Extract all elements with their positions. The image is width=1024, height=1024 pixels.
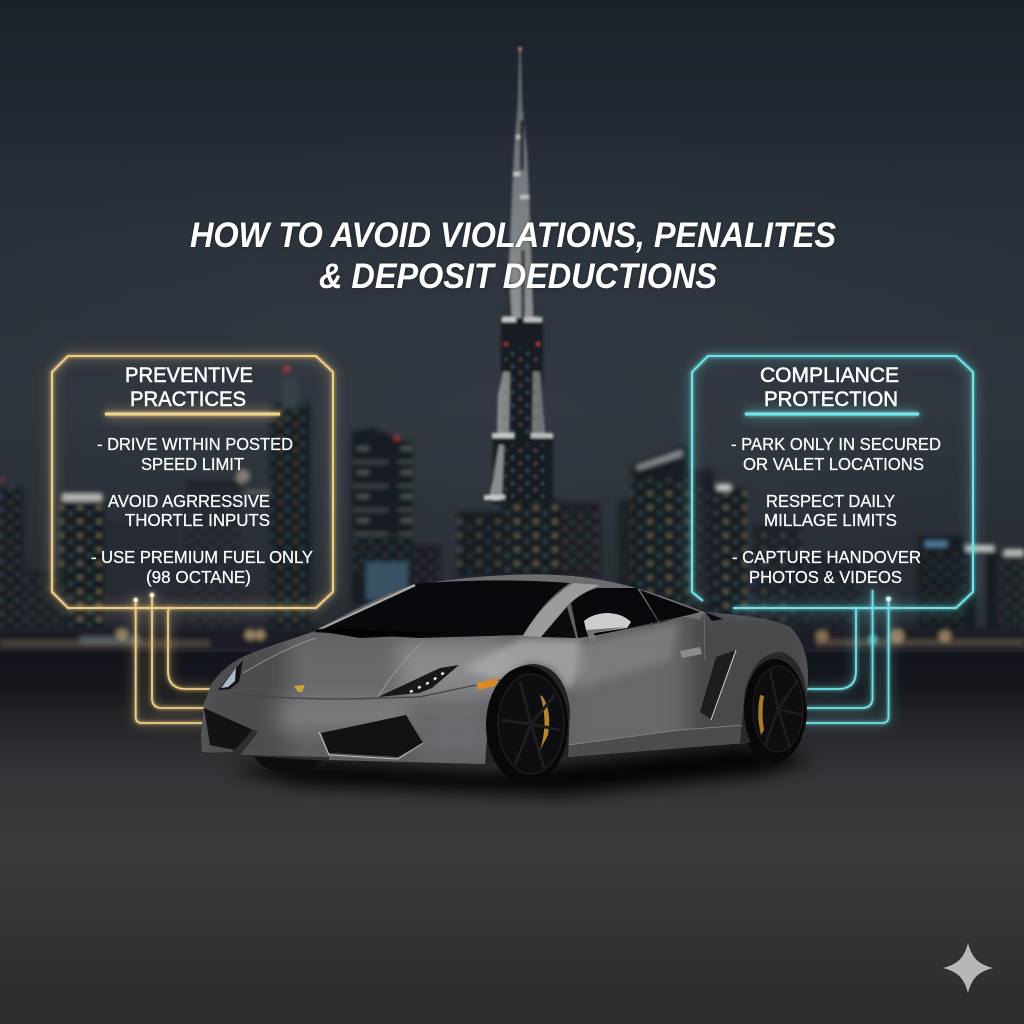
sports car (200, 574, 810, 784)
side window (571, 588, 659, 638)
panel list (731, 434, 941, 587)
panel list: SPEED LIMIT (141, 454, 244, 474)
door highlight (575, 622, 680, 690)
panel heading: PREVENTIVE (125, 364, 253, 387)
badge (294, 685, 305, 692)
amber marker (476, 678, 499, 690)
right front grille (321, 715, 423, 757)
mirror (584, 613, 631, 647)
windshield strip (312, 584, 416, 632)
panel list: AVOID AGRRESSIVE (108, 491, 270, 511)
left front grille (204, 708, 253, 750)
A pillar (523, 583, 600, 637)
car body silhouette (201, 574, 808, 764)
yellow connectors (134, 593, 214, 723)
panel list: PHOTOS & VIDEOS (749, 567, 902, 587)
side intake (700, 650, 736, 720)
panel list: THORTLE INPUTS (125, 510, 270, 530)
panel list: OR VALET LOCATIONS (743, 454, 924, 474)
roof (414, 574, 704, 620)
rear window (640, 590, 700, 623)
panel list: MILLAGE LIMITS (764, 510, 897, 530)
panel list: - DRIVE WITHIN POSTED (97, 434, 293, 454)
rear tyre under body (739, 657, 807, 763)
right headlight (378, 665, 459, 697)
shoulder line (578, 612, 705, 660)
panel: compliance protection (692, 356, 973, 608)
front wheel (486, 666, 568, 784)
panel heading (760, 364, 899, 411)
panel: preventive practices (52, 356, 333, 608)
rear wheel (744, 659, 806, 761)
fender highlight (462, 638, 590, 690)
front left tyre (253, 755, 327, 772)
panel heading: PROTECTION (764, 388, 898, 411)
grille trim (319, 732, 423, 759)
rear vent (705, 612, 723, 621)
door handle (680, 647, 702, 658)
quarter glass (541, 607, 576, 638)
water band (0, 652, 1024, 714)
panel list: - USE PREMIUM FUEL ONLY (91, 547, 313, 567)
front wheel arch (485, 664, 570, 764)
car shadow (225, 745, 815, 795)
heading underline (745, 412, 919, 416)
waterfront lights (0, 628, 1024, 652)
panel list: - CAPTURE HANDOVER (732, 547, 921, 567)
windshield (312, 580, 570, 638)
icon: sparkle (943, 943, 993, 993)
left headlight (218, 660, 243, 690)
main title (190, 216, 836, 296)
panel heading: COMPLIANCE (760, 364, 899, 387)
city skyline (0, 366, 1024, 648)
panel list: RESPECT DAILY (766, 491, 895, 511)
teal connectors (802, 590, 891, 723)
main title: HOW TO AVOID VIOLATIONS, PENALITES (190, 216, 836, 255)
panel frame (692, 356, 973, 608)
bonnet crease lines (243, 638, 423, 697)
panel list (91, 434, 313, 587)
main title: & DEPOSIT DEDUCTIONS (319, 257, 717, 296)
body shading (200, 574, 810, 770)
panel heading: PRACTICES (130, 388, 246, 411)
lower lip (202, 730, 329, 761)
panel heading (125, 364, 253, 411)
side sill (567, 724, 745, 757)
panel list: (98 OCTANE) (146, 567, 251, 587)
rear wheel arch (740, 652, 807, 743)
wipers (312, 628, 445, 638)
background: night sky (0, 0, 1024, 720)
Burj tower (458, 47, 600, 576)
panel frame (52, 356, 333, 608)
panel list: - PARK ONLY IN SECURED (731, 434, 941, 454)
left headlight lens (221, 668, 236, 688)
heading underline (105, 412, 280, 416)
floor (0, 710, 1024, 1024)
bonnet edge shadow (231, 680, 500, 699)
